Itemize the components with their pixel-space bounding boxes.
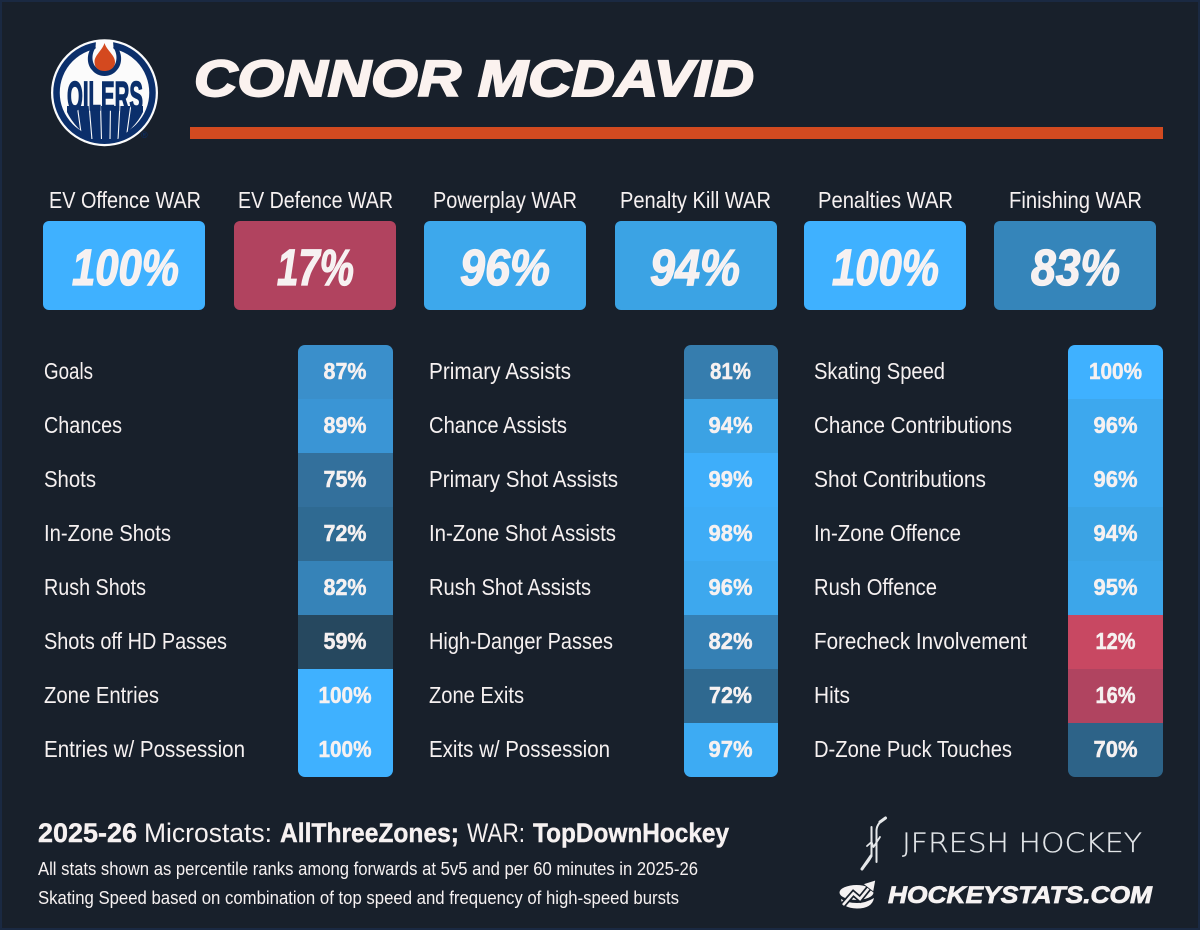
- stat labels column 3: [814, 358, 1028, 762]
- stat labels column 2: Rush Shot Assists: [429, 574, 591, 600]
- stat labels column 3: In-Zone Offence: [814, 520, 961, 546]
- percentile values column 1: 59%: [324, 628, 366, 654]
- stat labels column 3: Chance Contributions: [814, 412, 1012, 438]
- stat labels column 2: Primary Shot Assists: [429, 466, 618, 492]
- percentile values column 1: 87%: [324, 358, 366, 384]
- WAR panel: EV Defence: EV Defence WAR: [238, 187, 393, 213]
- logo: Edmonton Oilers: ®: [141, 130, 148, 140]
- WAR panel: Penalty Kill: [615, 187, 777, 310]
- percentile values column 1: 89%: [324, 412, 366, 438]
- footnote 1: All stats shown as percentile ranks among forwards at 5v5 and per 60 minutes in 2025-26: [38, 859, 698, 879]
- footer source line: AllThreeZones;: [280, 818, 459, 848]
- stat column 3: [814, 345, 1163, 777]
- WAR panel: Finishing: [994, 187, 1156, 310]
- WAR panel: Finishing: 83%: [1031, 239, 1120, 296]
- percentile values column 1: 72%: [324, 520, 366, 546]
- stat labels column 1: Zone Entries: [44, 682, 159, 708]
- stat column 2: [429, 345, 778, 777]
- percentile values column 3: 100%: [1089, 358, 1142, 384]
- percentile values column 2: 96%: [708, 574, 752, 600]
- WAR panel: Penalties: 100%: [832, 239, 939, 296]
- percentile values column 2: 81%: [710, 358, 751, 384]
- stat labels column 2: Exits w/ Possession: [429, 736, 610, 762]
- stat labels column 1: In-Zone Shots: [44, 520, 171, 546]
- percentile cells column 2: [684, 345, 778, 777]
- footer source line: Microstats:: [144, 818, 272, 848]
- WAR panel: Penalties: Penalties WAR: [818, 187, 953, 213]
- percentile values column 1: 100%: [318, 736, 372, 762]
- stat labels column 2: Chance Assists: [429, 412, 567, 438]
- stat labels column 3: D-Zone Puck Touches: [814, 736, 1012, 762]
- percentile values column 2: 98%: [708, 520, 752, 546]
- percentile values column 3: 94%: [1094, 520, 1138, 546]
- footnote 2: Skating Speed based on combination of top speed and frequency of high-speed bursts: [38, 888, 679, 908]
- stat labels column 3: Forecheck Involvement: [814, 628, 1028, 654]
- icon: crossed hockey sticks: [862, 818, 886, 869]
- percentile values column 2: 99%: [708, 466, 752, 492]
- WAR panel: EV Defence: [234, 187, 396, 310]
- percentile values column 3: 70%: [1094, 736, 1138, 762]
- WAR panel: Powerplay: [424, 187, 586, 310]
- stat column 1: [44, 345, 393, 777]
- percentile values column 3: 95%: [1094, 574, 1138, 600]
- WAR panel: Penalty Kill: Penalty Kill WAR: [620, 187, 771, 213]
- WAR panel: Penalty Kill: 94%: [650, 239, 740, 296]
- footer source line: [38, 818, 729, 848]
- stat labels column 1: Goals: [44, 358, 93, 384]
- footer source line: WAR:: [467, 818, 525, 848]
- WAR panel: EV Offence: EV Offence WAR: [49, 187, 201, 213]
- stat labels column 1: [44, 358, 245, 762]
- percentile values column 2: 97%: [708, 736, 752, 762]
- stat labels column 3: Shot Contributions: [814, 466, 986, 492]
- percentile cells column 3: [1068, 345, 1163, 777]
- stat labels column 1: Shots off HD Passes: [44, 628, 227, 654]
- stat labels column 3: Skating Speed: [814, 358, 945, 384]
- footer source line: 2025-26: [38, 818, 137, 848]
- icon: HockeyStats puck and arrow: [840, 880, 876, 908]
- WAR panel: EV Offence: 100%: [72, 239, 179, 296]
- logo: Edmonton Oilers: OILERS: [67, 73, 143, 119]
- percentile values column 1: [318, 358, 372, 762]
- logo: Edmonton Oilers: [51, 39, 158, 146]
- percentile values column 1: 100%: [318, 682, 372, 708]
- stat labels column 1: Entries w/ Possession: [44, 736, 245, 762]
- percentile values column 1: 82%: [324, 574, 366, 600]
- HockeyStats.com wordmark: HOCKEYSTATS.COM: [888, 882, 1153, 909]
- WAR panel: EV Defence: 17%: [277, 239, 354, 296]
- WAR panel: Powerplay: 96%: [460, 239, 550, 296]
- percentile values column 3: 96%: [1094, 412, 1138, 438]
- stat labels column 1: Rush Shots: [44, 574, 146, 600]
- WAR panel: EV Offence: [43, 187, 205, 310]
- percentile values column 3: 96%: [1094, 466, 1138, 492]
- percentile values column 2: 82%: [708, 628, 752, 654]
- stat labels column 3: Rush Offence: [814, 574, 937, 600]
- title: CONNOR MCDAVID: [194, 50, 754, 107]
- WAR panel: Finishing: Finishing WAR: [1009, 187, 1142, 213]
- stat labels column 1: Shots: [44, 466, 96, 492]
- percentile values column 1: 75%: [324, 466, 366, 492]
- WAR panel: Powerplay: Powerplay WAR: [433, 187, 577, 213]
- stat labels column 1: Chances: [44, 412, 122, 438]
- percentile values column 2: [708, 358, 752, 762]
- stat labels column 2: [429, 358, 618, 762]
- percentile values column 3: 16%: [1096, 682, 1136, 708]
- footer source line: TopDownHockey: [533, 818, 729, 848]
- percentile cells column 1: [298, 345, 393, 777]
- stat labels column 3: Hits: [814, 682, 850, 708]
- JFresh Hockey wordmark: JFRESH HOCKEY: [902, 828, 1142, 859]
- title underline bar: [190, 127, 1163, 139]
- percentile values column 3: [1089, 358, 1142, 762]
- stat labels column 2: Primary Assists: [429, 358, 571, 384]
- WAR panel: Penalties: [804, 187, 966, 310]
- stat labels column 2: In-Zone Shot Assists: [429, 520, 616, 546]
- stat labels column 2: High-Danger Passes: [429, 628, 613, 654]
- percentile values column 2: 94%: [708, 412, 752, 438]
- percentile values column 3: 12%: [1096, 628, 1136, 654]
- percentile values column 2: 72%: [709, 682, 752, 708]
- stat labels column 2: Zone Exits: [429, 682, 524, 708]
